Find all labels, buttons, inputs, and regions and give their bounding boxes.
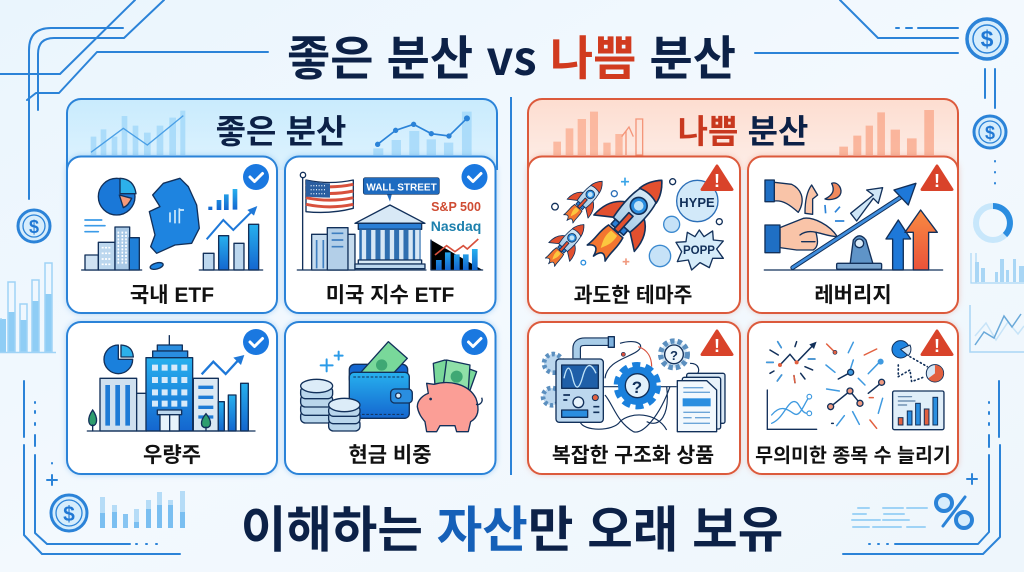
card background xyxy=(67,322,277,474)
card background xyxy=(285,156,496,313)
bottom message: 이해하는 자산만 오래 보유 xyxy=(241,491,783,562)
burst text POPP: POPP xyxy=(683,245,715,257)
icon: dollar coin left xyxy=(18,210,50,242)
card background xyxy=(67,156,277,313)
label: 미국 지수 ETF xyxy=(326,284,454,307)
badge: warning xyxy=(702,331,732,356)
circuit lines top left xyxy=(0,0,268,199)
icon: rockets and hype bubbles xyxy=(538,162,723,274)
index names: Nasdaq xyxy=(431,218,481,234)
card: 과도한 테마주 xyxy=(528,156,740,313)
icon: dollar coin right xyxy=(974,116,1006,148)
badge: warning: ! xyxy=(934,171,940,191)
badge: check xyxy=(462,329,488,355)
circuit lines top right xyxy=(755,0,995,184)
circuit lines bottom left xyxy=(24,381,180,554)
gear question marks xyxy=(632,348,678,397)
divider xyxy=(510,97,512,475)
icon: Korea map, pie, buildings, chart xyxy=(82,178,263,271)
icon: dollar coin right: $ xyxy=(985,123,995,143)
left side bar chart xyxy=(0,263,56,352)
heading: 좋은 분산 xyxy=(216,105,346,153)
bottom left bar chart xyxy=(100,491,185,528)
label: 레버리지 xyxy=(814,284,892,307)
card: 무의미한 종목 수 늘리기 xyxy=(748,322,958,474)
badge: warning xyxy=(922,166,952,191)
circuit lines bottom right xyxy=(843,381,1000,554)
label: 과도한 테마주 xyxy=(574,284,692,307)
header bar chart right xyxy=(839,110,934,155)
badge: check xyxy=(243,329,269,355)
card background xyxy=(528,322,740,474)
sign text: WALL STREET xyxy=(366,182,437,194)
icon: hands pressing leverage arm with arrows xyxy=(764,180,943,270)
icon: machine, gears and documents xyxy=(543,337,725,432)
icon: scattered charts and dots xyxy=(767,341,944,430)
header bar chart left xyxy=(553,112,643,155)
badge: check xyxy=(462,164,488,190)
card background xyxy=(748,322,958,474)
icon: dollar coin left: $ xyxy=(29,217,39,237)
index names xyxy=(431,200,481,234)
card background xyxy=(748,156,958,313)
icon: dollar coin top right xyxy=(967,19,1007,59)
card: 레버리지 xyxy=(748,156,958,313)
panel: bad diversification xyxy=(528,99,958,474)
icon: dollar coin top right: $ xyxy=(981,26,994,52)
label: 복잡한 구조화 상품 xyxy=(552,444,714,467)
icon: blue-chip company buildings xyxy=(87,336,255,431)
label: 무의미한 종목 수 늘리기 xyxy=(755,445,951,467)
heading: 나쁨 분산 xyxy=(678,105,808,153)
card background xyxy=(285,322,496,474)
right side donut chart xyxy=(976,206,1010,240)
title: 좋은 분산 vs 나쁨 분산 xyxy=(287,20,736,89)
card: 국내 ETF xyxy=(67,156,277,313)
header bar chart left xyxy=(91,111,185,155)
card: 복잡한 구조화 상품 xyxy=(528,322,740,474)
badge: check xyxy=(243,164,269,190)
panel: good diversification xyxy=(67,99,497,474)
bubble text HYPE: HYPE xyxy=(679,195,715,210)
label: 우량주 xyxy=(143,444,201,467)
right side line chart xyxy=(970,305,1024,352)
card background xyxy=(528,156,740,313)
bottom right text lines and percent xyxy=(852,495,972,528)
icon: flag, Wall Street temple, indexes xyxy=(297,172,483,270)
card: 미국 지수 ETF xyxy=(285,156,496,313)
label: 현금 비중 xyxy=(348,444,432,467)
badge: warning xyxy=(922,331,952,356)
label: 국내 ETF xyxy=(130,284,214,307)
icon: dollar coin bottom left xyxy=(51,495,87,531)
badge: warning: ! xyxy=(714,171,720,191)
header line chart right xyxy=(373,112,472,155)
gear question marks: ? xyxy=(670,348,678,363)
card: 현금 비중 xyxy=(285,322,496,474)
card: 우량주 xyxy=(67,322,277,474)
icon: dollar coin bottom left: $ xyxy=(63,503,75,526)
badge: warning: ! xyxy=(714,336,720,356)
index names: S&P 500 xyxy=(431,200,481,214)
badge: warning: ! xyxy=(934,336,940,356)
badge: warning xyxy=(702,166,732,191)
gear question marks: ? xyxy=(632,378,642,397)
panel header background xyxy=(67,99,497,170)
icon: coins, wallet, piggy bank xyxy=(301,342,482,432)
right side small bar chart xyxy=(971,253,1024,283)
panel header background xyxy=(528,99,958,170)
